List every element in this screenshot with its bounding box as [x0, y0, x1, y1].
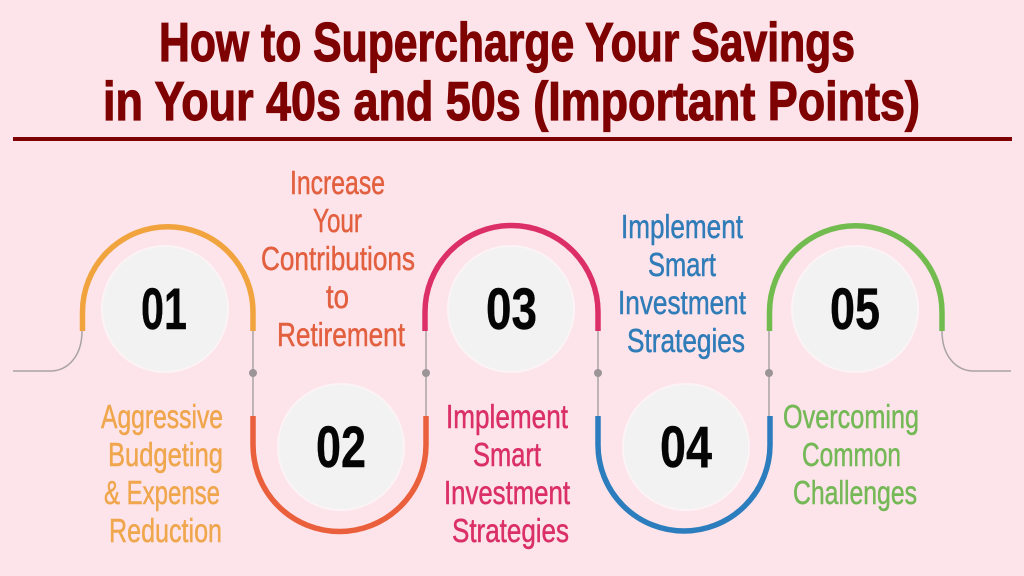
- label 02: Contributions: [261, 240, 415, 277]
- label 02: Your: [313, 202, 362, 239]
- label 04: Investment: [618, 284, 746, 321]
- label 05: [783, 398, 919, 511]
- label 01: Budgeting: [108, 436, 223, 473]
- label 03: [444, 398, 570, 549]
- title: [103, 11, 920, 132]
- step 05: [770, 226, 942, 511]
- number circle 04: [623, 384, 749, 510]
- label 04: [618, 208, 746, 359]
- label 05: Common: [802, 436, 901, 473]
- label 05: Challenges: [793, 474, 917, 511]
- number 04: 04: [660, 415, 712, 480]
- connector: grey lines and dots: [13, 331, 1011, 416]
- label 03: Investment: [444, 474, 570, 511]
- label 02: Increase: [290, 164, 385, 201]
- arc 05: [770, 226, 942, 331]
- step 02: [253, 164, 426, 531]
- step 03: [425, 226, 598, 549]
- number circle 02: [278, 384, 404, 510]
- label 04: Smart: [648, 246, 716, 283]
- label 05: Overcoming: [783, 398, 919, 435]
- arc 04: [598, 416, 770, 531]
- step 01: [82, 227, 253, 549]
- label 01: & Expense: [104, 474, 220, 511]
- number circle 01: [102, 246, 228, 372]
- step 04: [598, 208, 770, 531]
- label 02: Retirement: [277, 316, 405, 353]
- number 01: 01: [141, 277, 187, 342]
- label 03: Strategies: [452, 512, 569, 549]
- arc 02: [253, 416, 426, 531]
- arc 01: [82, 227, 253, 331]
- number circle 03: [448, 246, 574, 372]
- number 05: 05: [830, 277, 880, 342]
- number circle 05: [792, 246, 918, 372]
- arc 03: [425, 226, 598, 331]
- number 02: 02: [316, 415, 366, 480]
- label 01: Aggressive: [101, 398, 223, 435]
- label 03: Implement: [446, 398, 568, 435]
- label 04: Implement: [621, 208, 743, 245]
- label 02: [261, 164, 415, 353]
- label 01: Reduction: [109, 512, 222, 549]
- label 04: Strategies: [627, 322, 745, 359]
- label 03: Smart: [473, 436, 541, 473]
- label 02: to: [326, 278, 349, 315]
- number 03: 03: [486, 277, 537, 342]
- label 01: [101, 398, 223, 549]
